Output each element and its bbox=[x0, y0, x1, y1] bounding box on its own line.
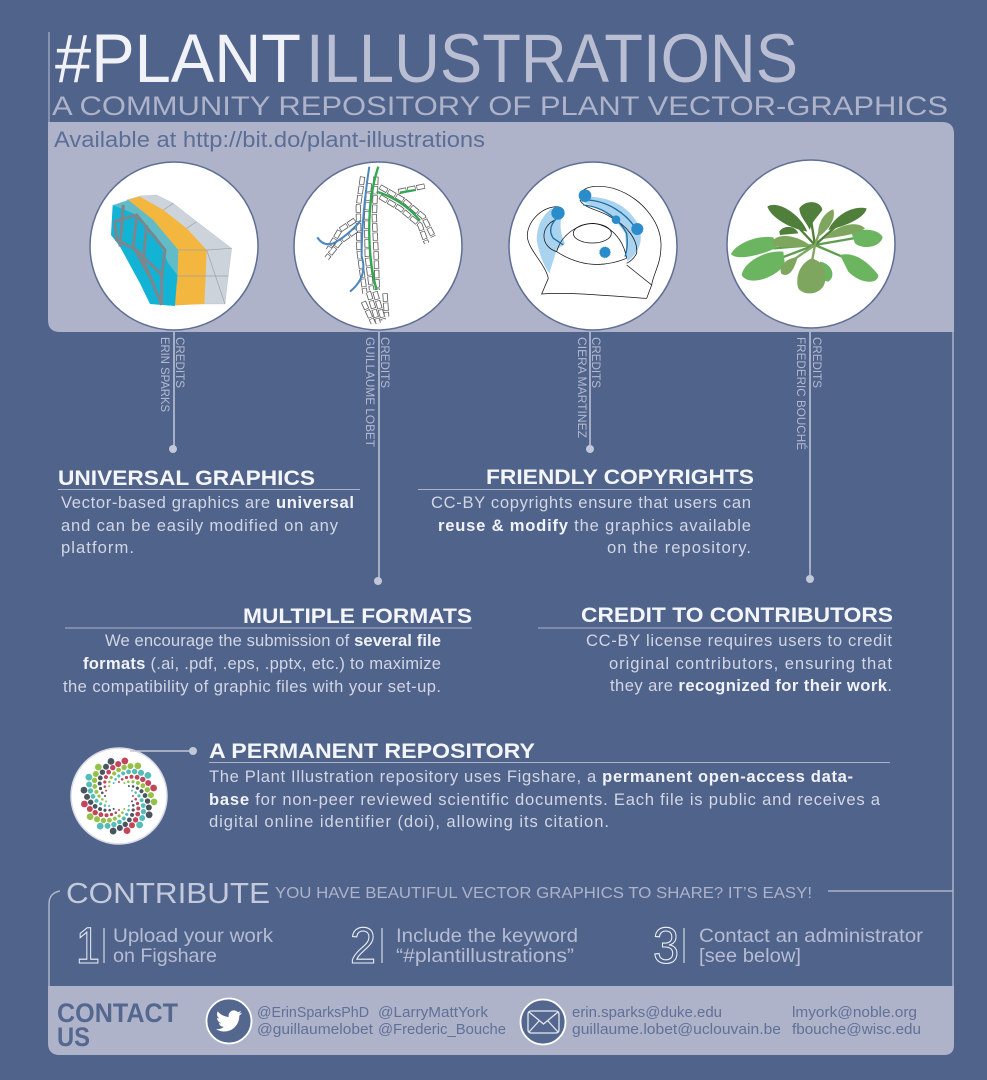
section: universal graphics: platform. bbox=[61, 538, 134, 557]
step 2: “#plantillustrations” bbox=[396, 945, 574, 967]
step 1: 1 bbox=[76, 917, 100, 974]
credit: Ciera Martinez: CIERA MARTINEZ bbox=[575, 337, 587, 438]
twitter handles bbox=[257, 1005, 506, 1038]
section: multiple formats bbox=[63, 605, 472, 696]
section: permanent repository: A PERMANENT REPOSITORY bbox=[209, 740, 535, 763]
repository link: Available at http://bit.do/plant-illustrations bbox=[54, 127, 485, 152]
email addresses: fbouche@wisc.edu bbox=[792, 1022, 921, 1038]
section: permanent repository: The Plant Illustration repository uses Figshare, a permanent open-access data- bbox=[209, 767, 853, 786]
panel: contribute bbox=[49, 878, 953, 986]
credit: Ciera Martinez bbox=[575, 332, 601, 453]
step 2 bbox=[350, 917, 578, 974]
contact heading: US bbox=[57, 1022, 90, 1052]
section: permanent repository: digital online identifier (doi), allowing its citation. bbox=[209, 812, 609, 831]
twitter handles: @LarryMattYork bbox=[378, 1005, 489, 1021]
illustration: shoot meristem outline bbox=[509, 162, 677, 330]
section: permanent repository bbox=[209, 740, 890, 831]
section: multiple formats: formats (.ai, .pdf, .eps, .pptx, etc.) to maximize bbox=[83, 654, 441, 673]
contribute tagline: YOU HAVE BEAUTIFUL VECTOR GRAPHICS TO SHARE? IT’S EASY! bbox=[275, 885, 812, 902]
email addresses bbox=[572, 1005, 921, 1038]
contact heading: CONTACT bbox=[57, 998, 178, 1028]
step 3: Contact an administrator bbox=[699, 925, 924, 947]
section: universal graphics bbox=[58, 467, 360, 557]
section: multiple formats: We encourage the submission of several file bbox=[105, 631, 441, 650]
section: universal graphics: and can be easily modified on any bbox=[61, 516, 339, 535]
title bbox=[55, 20, 798, 97]
step 1 bbox=[76, 917, 273, 974]
credit: Guillaume Lobet: CREDITS bbox=[378, 337, 390, 388]
credit: Frederic Bouche: FREDERIC BOUCHÉ bbox=[794, 337, 807, 450]
step 3 bbox=[653, 917, 924, 974]
step 2: Include the keyword bbox=[396, 925, 578, 947]
step 2: 2 bbox=[350, 917, 376, 974]
icon: twitter bbox=[206, 998, 252, 1044]
section: credit to contributors: CREDIT TO CONTRIBUTORS bbox=[581, 604, 893, 627]
panel: contact bbox=[48, 986, 954, 1055]
step 1: on Figshare bbox=[113, 945, 217, 967]
section: universal graphics: UNIVERSAL GRAPHICS bbox=[58, 467, 315, 490]
credit: Ciera Martinez: CREDITS bbox=[589, 337, 601, 388]
credit: Erin Sparks: ERIN SPARKS bbox=[158, 337, 170, 412]
email addresses: erin.sparks@duke.edu bbox=[572, 1005, 722, 1021]
title: ILLUSTRATIONS bbox=[306, 20, 798, 97]
email addresses: lmyork@noble.org bbox=[792, 1005, 917, 1021]
twitter handles: @guillaumelobet bbox=[257, 1022, 373, 1038]
section: friendly copyrights bbox=[418, 466, 754, 557]
credit: Erin Sparks: CREDITS bbox=[173, 337, 185, 388]
section: credit to contributors: CC-BY license requires users to credit bbox=[586, 631, 892, 650]
icon: email bbox=[520, 1000, 566, 1044]
section: universal graphics: Vector-based graphics are universal bbox=[61, 493, 354, 512]
section: credit to contributors: original contributors, ensuring that bbox=[609, 654, 892, 673]
credit: Guillaume Lobet: GUILLAUME LOBET bbox=[363, 337, 375, 447]
credit: Guillaume Lobet bbox=[363, 332, 390, 585]
section: multiple formats: the compatibility of graphic files with your set-up. bbox=[63, 677, 441, 696]
connector: logo to heading bbox=[130, 747, 197, 755]
contact heading bbox=[57, 998, 178, 1052]
section: friendly copyrights: reuse & modify the graphics available bbox=[438, 516, 751, 535]
icon: figshare logo bbox=[71, 748, 167, 844]
section: credit to contributors bbox=[538, 604, 893, 695]
twitter handles: @ErinSparksPhD bbox=[257, 1005, 369, 1021]
step 1: Upload your work bbox=[113, 925, 273, 947]
contribute heading: CONTRIBUTE bbox=[66, 878, 270, 910]
illustration: rosette plant bbox=[727, 160, 895, 328]
credit: Frederic Bouche: CREDITS bbox=[810, 337, 822, 388]
section: multiple formats: MULTIPLE FORMATS bbox=[243, 605, 472, 628]
title: #PLANT bbox=[55, 20, 301, 97]
panel: illustrations bbox=[48, 122, 954, 332]
illustration: root tissue block bbox=[90, 162, 258, 330]
section: friendly copyrights: CC-BY copyrights ensure that users can bbox=[431, 493, 751, 512]
subtitle: A COMMUNITY REPOSITORY OF PLANT VECTOR-GRAPHICS bbox=[52, 91, 948, 121]
section: friendly copyrights: on the repository. bbox=[607, 538, 751, 557]
section: friendly copyrights: FRIENDLY COPYRIGHTS bbox=[486, 466, 754, 489]
step 3: 3 bbox=[653, 917, 679, 974]
section: credit to contributors: they are recognized for their work. bbox=[610, 676, 892, 695]
section: permanent repository: base for non-peer reviewed scientific documents. Each file is public and receives a bbox=[209, 790, 881, 809]
step 3: [see below] bbox=[699, 945, 801, 967]
illustration: root cell architecture bbox=[294, 162, 462, 330]
twitter handles: @Frederic_Bouche bbox=[378, 1022, 506, 1038]
credit: Erin Sparks bbox=[158, 332, 185, 453]
credit: Frederic Bouche bbox=[794, 332, 822, 583]
email addresses: guillaume.lobet@uclouvain.be bbox=[572, 1022, 781, 1038]
